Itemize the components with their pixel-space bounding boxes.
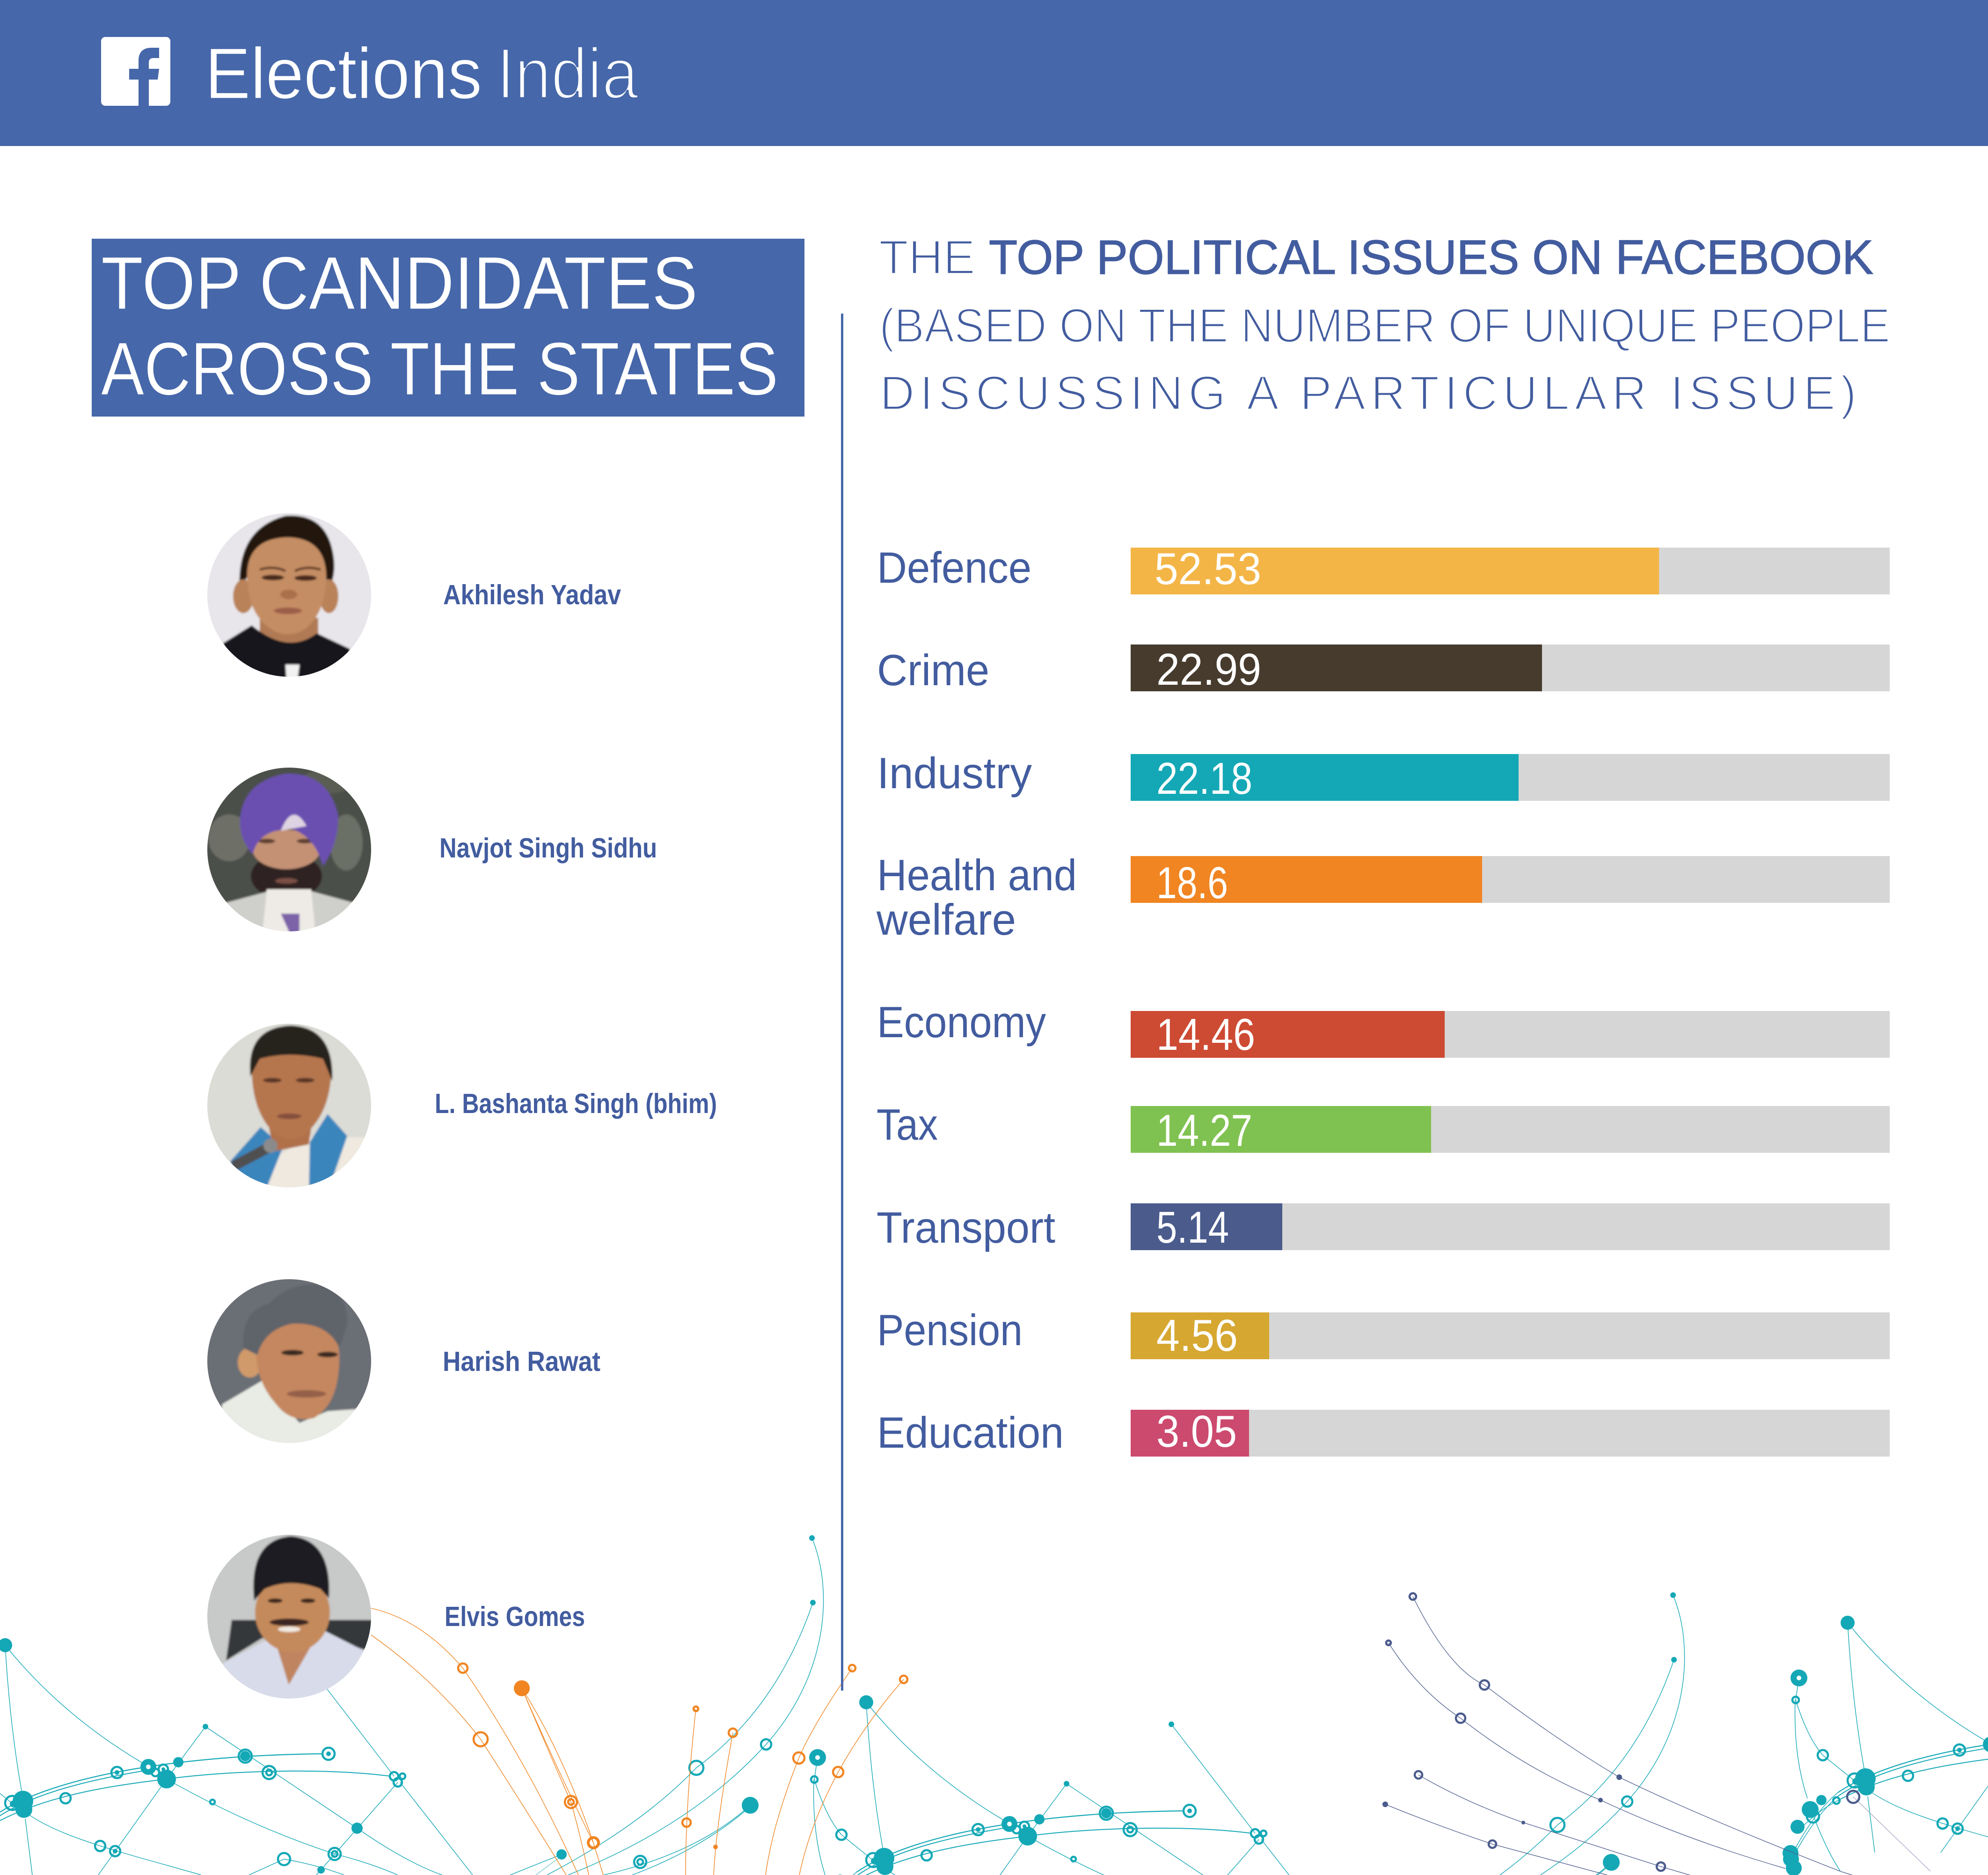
- bar row: Education: Education: [877, 1408, 1064, 1457]
- header title: [205, 33, 638, 114]
- bar row: Health and welfare: Health and: [877, 850, 1077, 900]
- bar row: Pension: Pension: [877, 1305, 1023, 1355]
- photo: Elvis Gomes: [201, 1528, 377, 1708]
- panel heading: top candidates: ACROSS THE STATES: [101, 327, 778, 410]
- bar row: Health and welfare: 18.6: [1156, 858, 1228, 908]
- bar row: Industry: 22.18: [1156, 754, 1252, 804]
- photo: Akhilesh Yadav: [207, 513, 371, 677]
- bar row: Industry: Industry: [877, 748, 1032, 798]
- bar row: Defence: Defence: [877, 543, 1031, 592]
- network: orange arcs: [371, 1608, 907, 1875]
- bar row: Pension: [877, 1305, 1890, 1361]
- bar row: Crime: [877, 645, 1890, 695]
- bar row: Education: [877, 1406, 1890, 1457]
- panel heading: top candidates: TOP CANDIDATES: [101, 241, 698, 325]
- bar row: Transport: 5.14: [1156, 1202, 1229, 1252]
- bar row: Economy: Economy: [877, 997, 1046, 1047]
- bar row: Defence: [877, 543, 1890, 594]
- name: Akhilesh Yadav: Akhilesh Yadav: [443, 579, 621, 610]
- bar row: Economy: 14.46: [1156, 1010, 1255, 1060]
- bar row: Health and welfare: welfare: [876, 895, 1016, 944]
- network: blue arcs: [1382, 1593, 1930, 1875]
- name: Harish Rawat: Harish Rawat: [443, 1346, 600, 1377]
- bar row: Industry: [877, 748, 1890, 804]
- vertical divider: [841, 314, 843, 1691]
- bar row: Tax: 14.27: [1156, 1106, 1252, 1156]
- header title: India: [497, 33, 638, 114]
- bar row: Transport: Transport: [877, 1203, 1055, 1252]
- candidate: Harish Rawat: [201, 1273, 600, 1451]
- candidate: Akhilesh Yadav: [201, 508, 621, 683]
- panel heading: political issues: [879, 230, 1890, 420]
- network: centre teal: [801, 1695, 1334, 1875]
- bar row: Defence: 52.53: [1155, 544, 1261, 594]
- photo: Navjot Singh Sidhu: [207, 768, 371, 931]
- candidate: L. Bashanta Singh (bhim): [201, 1018, 717, 1194]
- name: Elvis Gomes: Elvis Gomes: [445, 1601, 585, 1632]
- bar row: Economy: [877, 997, 1890, 1060]
- photo: Harish Rawat: [201, 1273, 377, 1451]
- panel heading: political issues: THE: [879, 230, 975, 284]
- header band: [0, 0, 1988, 146]
- candidate: Navjot Singh Sidhu: [201, 763, 657, 938]
- candidate: Elvis Gomes: [201, 1528, 585, 1708]
- name: L. Bashanta Singh: L. Bashanta Singh (bhim): [435, 1088, 717, 1119]
- bar row: Crime: Crime: [877, 645, 989, 695]
- network: mid teal arcs: [510, 1535, 824, 1875]
- network: left teal: [0, 1638, 473, 1875]
- panel heading: political issues: (BASED ON THE NUMBER OF UNIQUE PEOPLE: [879, 299, 1890, 352]
- bar row: Tax: Tax: [877, 1100, 938, 1149]
- bar row: Education: 3.05: [1156, 1406, 1237, 1457]
- bar row: Health and welfare: [876, 850, 1890, 944]
- header title: Elections: [205, 33, 482, 114]
- bar row: Pension: 4.56: [1156, 1311, 1238, 1361]
- bar row: Crime: 22.99: [1156, 645, 1261, 695]
- panel heading: top candidates: [92, 239, 804, 417]
- panel heading: political issues: TOP POLITICAL ISSUES ON FACEBOOK: [989, 230, 1873, 284]
- photo: L. Bashanta Singh: [201, 1018, 379, 1194]
- name: Navjot Singh Sidhu: Navjot Singh Sidhu: [439, 833, 657, 864]
- panel heading: political issues: DISCUSSING A PARTICULAR ISSUE): [880, 366, 1856, 420]
- network: right teal arcs: [1371, 1592, 1685, 1875]
- network: right teal: [1783, 1616, 1988, 1875]
- bar row: Transport: [877, 1202, 1890, 1252]
- bar row: Tax: [877, 1100, 1890, 1156]
- icon: facebook logo: [101, 37, 170, 106]
